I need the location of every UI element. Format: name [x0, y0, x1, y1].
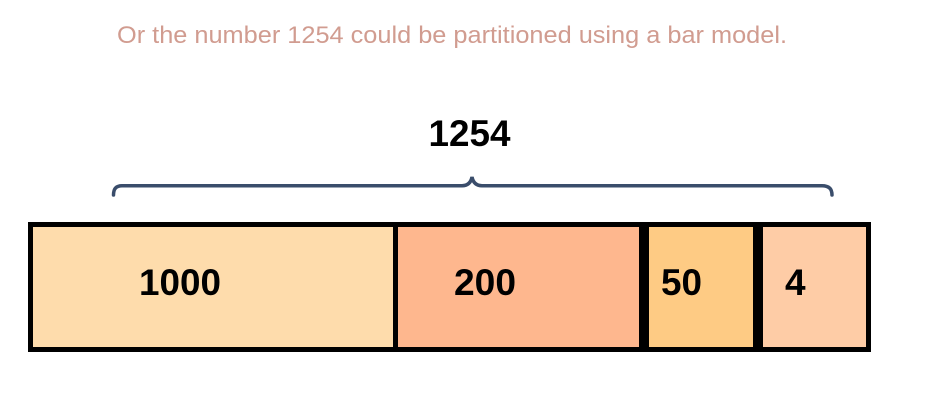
curly brace spanning the bar — [114, 177, 832, 195]
bar model — [30, 224, 868, 350]
bar segment: 50: 50 — [661, 262, 702, 303]
bar segment: 1000: 1000 — [139, 262, 221, 303]
bar segment: 4 — [758, 224, 868, 350]
divider thickening between 50 and 4 — [753, 224, 763, 349]
bar segment: 50 — [644, 224, 758, 350]
divider thickening between 200 and 50 — [639, 224, 649, 349]
bar segment: 4: 4 — [785, 262, 806, 303]
total label: 1254: 1254 — [428, 113, 511, 154]
heading: intro sentence: Or the number 1254 could be partitioned using a bar model. — [117, 22, 787, 49]
bar segment: 1000 — [30, 224, 396, 350]
bar segment: 200: 200 — [454, 262, 516, 303]
bar segment: 200 — [396, 224, 644, 350]
